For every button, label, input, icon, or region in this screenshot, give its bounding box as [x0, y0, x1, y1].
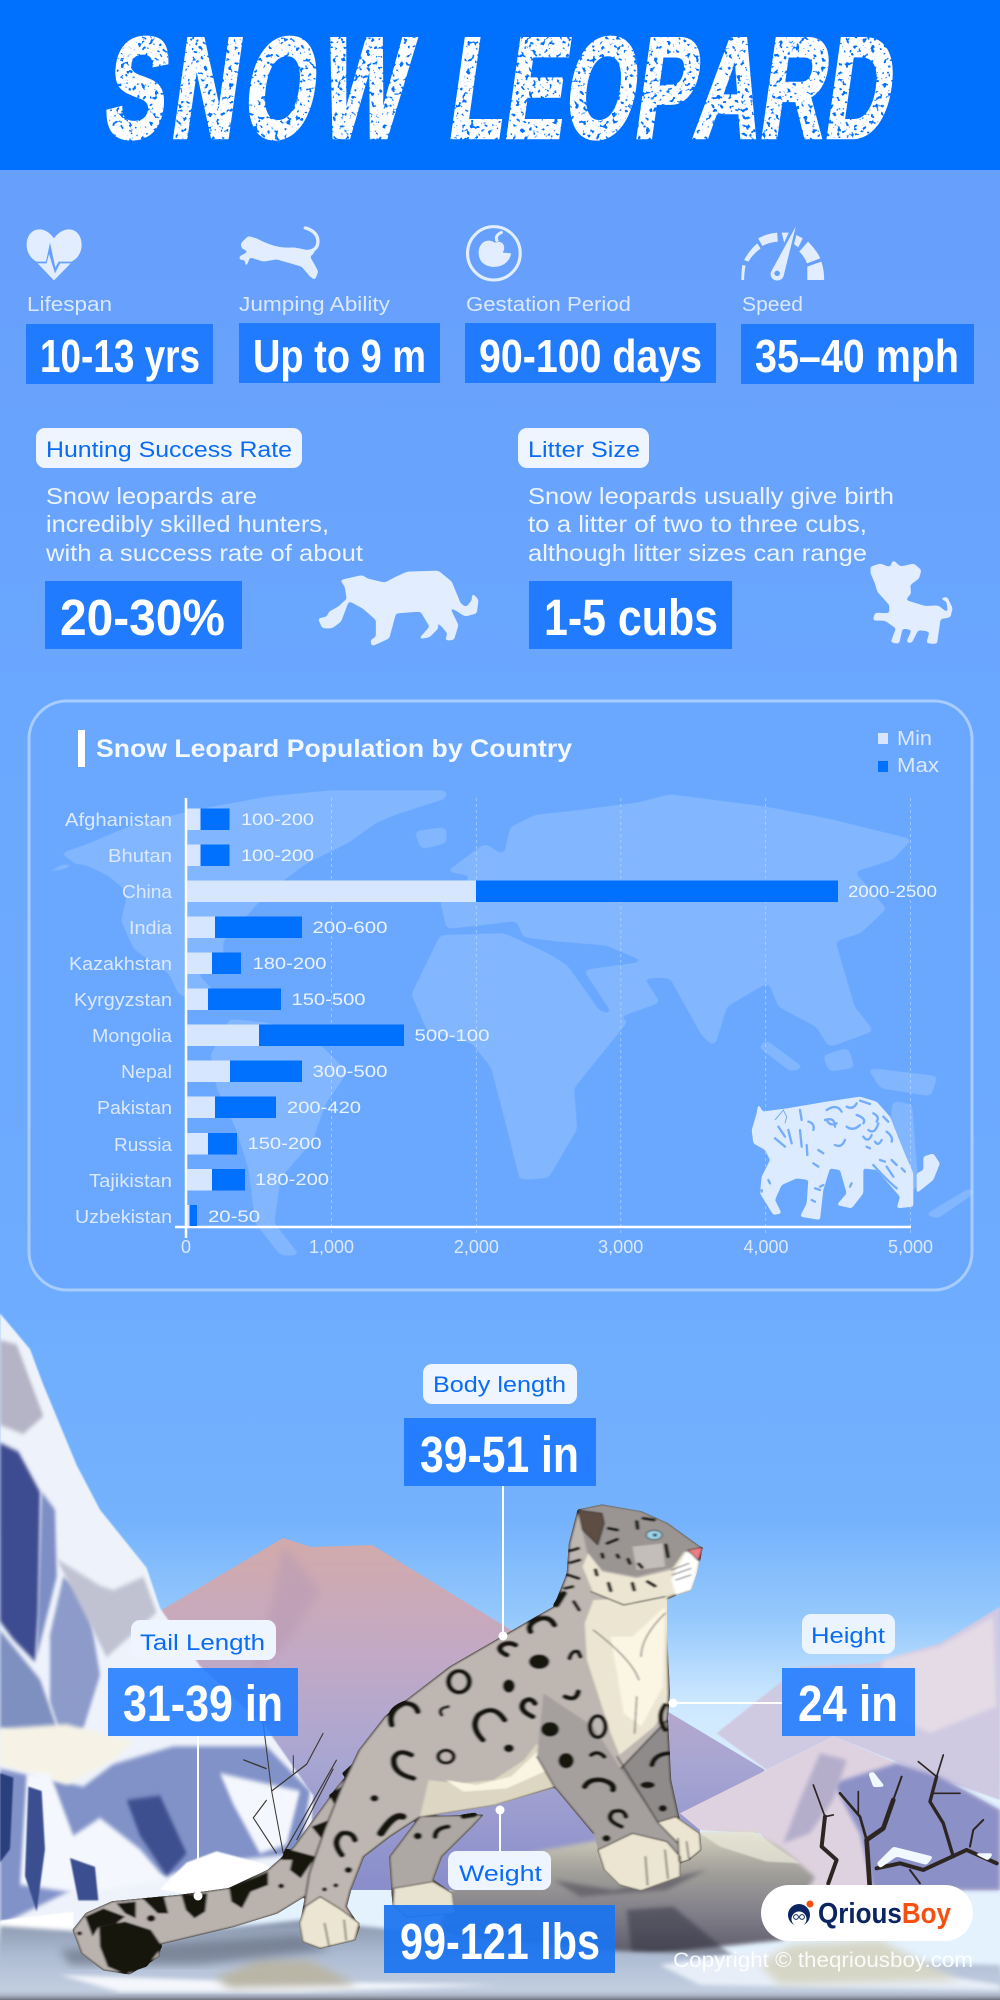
ruff and muzzle — [583, 1552, 700, 1605]
rear paw — [299, 1897, 359, 1948]
rock ledge — [440, 1832, 815, 1970]
text block: hunting description: with a success rate of about — [45, 540, 364, 566]
bar chart — [65, 798, 940, 1257]
text block: litter description — [528, 483, 894, 566]
axis tick labels: 5,000 — [888, 1237, 933, 1257]
panel: litter size: Litter Size — [528, 437, 640, 462]
callout: body length: Body length — [433, 1372, 566, 1397]
row: Pakistan — [97, 1096, 361, 1118]
row: Russia: 150-200 — [248, 1134, 322, 1153]
row: Kazakhstan: Kazakhstan — [69, 954, 172, 974]
icon: heart with pulse — [27, 229, 82, 280]
row: Kazakhstan: 180-200 — [252, 954, 326, 973]
row: Afghanistan: Afghanistan — [65, 810, 172, 830]
row: Kyrgyzstan: Kyrgyzstan — [74, 990, 172, 1010]
row: China: 2000-2500 — [848, 882, 937, 901]
row: Tajikistan — [89, 1169, 329, 1191]
row: Mongolia — [92, 1024, 490, 1046]
row: Afghanistan: 100-200 — [241, 810, 314, 829]
panel: population chart — [29, 701, 973, 1290]
panel: hunting success rate — [36, 428, 479, 649]
right front mountain — [680, 1737, 1000, 1890]
far hind leg — [390, 1815, 483, 1917]
axis tick labels: 4,000 — [743, 1237, 789, 1257]
callout: height: 24 in — [798, 1675, 898, 1732]
row: Kyrgyzstan — [74, 988, 366, 1010]
world map — [32, 790, 973, 1256]
callout: tail length — [108, 1620, 298, 1900]
callout: body length — [404, 1364, 596, 1640]
row: China — [122, 880, 937, 902]
row: Mongolia: Mongolia — [92, 1026, 173, 1046]
panel: litter size: 1-5 cubs — [544, 589, 718, 646]
stat: jumping ability — [239, 227, 440, 383]
stat: lifespan — [26, 229, 213, 384]
stat: jumping ability: Up to 9 m — [253, 330, 426, 382]
row: Uzbekistan: Uzbekistan — [75, 1207, 172, 1227]
text block: litter description: to a litter of two to three cubs, — [528, 511, 867, 537]
row: India: India — [129, 918, 173, 938]
far front leg — [615, 1713, 701, 1867]
panel: hunting success rate: 20-30% — [60, 589, 225, 646]
axis tick labels: 2,000 — [454, 1237, 499, 1257]
near front leg — [537, 1693, 680, 1890]
icon: boy with lightbulb — [788, 1900, 814, 1926]
legend: Max — [897, 755, 939, 777]
icon: embryo in circle — [468, 227, 520, 280]
text block: hunting description — [45, 483, 364, 566]
row: Uzbekistan — [75, 1205, 260, 1227]
spots — [336, 1618, 667, 1855]
logo: QriousBoy — [761, 1885, 973, 1941]
row: India — [129, 916, 388, 938]
scene: mountains and ground — [0, 1313, 1000, 2000]
snow leopard illustration — [73, 1505, 703, 1974]
panel heading: Snow Leopard Population by Country — [96, 735, 572, 763]
icon: leaping cat — [239, 227, 318, 280]
row: Nepal: 300-500 — [312, 1062, 388, 1081]
nose — [688, 1547, 703, 1561]
callout: height: Height — [811, 1623, 885, 1648]
callout: weight: 99-121 lbs — [400, 1913, 600, 1970]
left bare tree — [243, 1724, 337, 1854]
center pink mountain — [160, 1538, 765, 1890]
row: Pakistan: 200-420 — [287, 1098, 361, 1117]
row: Russia — [114, 1133, 322, 1155]
stat: gestation period — [465, 227, 716, 383]
tail tip and markings — [85, 1763, 364, 1974]
icon: cub — [870, 559, 953, 644]
stat: speed: Speed — [742, 294, 803, 316]
header band — [0, 0, 1000, 170]
row: Kazakhstan — [69, 952, 326, 974]
body — [301, 1505, 702, 1948]
head and neck markings — [557, 1518, 668, 1610]
callout: tail length: Tail Length — [140, 1630, 265, 1655]
eye — [646, 1530, 662, 1540]
row: Russia: Russia — [114, 1135, 173, 1155]
icon: speedometer — [741, 227, 824, 281]
legend — [878, 728, 939, 777]
stat: speed: 35–40 mph — [755, 330, 959, 382]
axis tick labels — [181, 1237, 933, 1257]
text block: litter description: Snow leopards usually give birth — [528, 483, 894, 509]
row: Uzbekistan: 20-50 — [208, 1207, 260, 1226]
row: Bhutan — [108, 844, 314, 866]
row: Tajikistan: 180-200 — [255, 1170, 329, 1189]
ear — [578, 1510, 604, 1545]
icon: cat catching bird — [318, 571, 479, 647]
callout: body length: 39-51 in — [420, 1426, 579, 1483]
callout: weight: Weight — [459, 1861, 542, 1886]
title: SNOW LEOPARD — [97, 10, 905, 168]
left snowy cliff — [0, 1313, 313, 1943]
tree snow — [868, 1772, 993, 1868]
axis tick labels: 0 — [181, 1237, 191, 1257]
near paw — [598, 1833, 680, 1891]
whiskers — [593, 1563, 691, 1733]
belly — [420, 1743, 554, 1817]
tail — [73, 1767, 372, 1974]
right back mountain — [717, 1607, 1000, 1800]
panel: litter size — [518, 428, 953, 649]
text block: litter description: although litter sizes can range — [528, 540, 867, 566]
callout: tail length: 31-39 in — [123, 1675, 283, 1732]
row: Bhutan: Bhutan — [108, 846, 172, 866]
row: China: China — [122, 882, 173, 902]
axis tick labels: 3,000 — [598, 1237, 643, 1257]
stat: gestation period: 90-100 days — [479, 330, 702, 382]
axes — [175, 798, 911, 1238]
stat: gestation period: Gestation Period — [466, 294, 631, 316]
mountain ridge shading — [250, 1545, 320, 1680]
text block: hunting description: Snow leopards are — [46, 483, 257, 509]
row: Pakistan: Pakistan — [97, 1098, 172, 1118]
callout: weight — [384, 1806, 615, 1973]
chest fur — [585, 1597, 667, 1755]
row: Nepal — [121, 1060, 388, 1082]
stat: lifespan: 10-13 yrs — [40, 330, 200, 382]
row: Kyrgyzstan: 150-500 — [292, 990, 366, 1009]
logo: QriousBoy: QriousBoy — [818, 1898, 951, 1930]
stat: jumping ability: Jumping Ability — [239, 294, 390, 316]
row: Mongolia: 500-100 — [414, 1026, 490, 1045]
panel heading — [78, 730, 572, 767]
text block: hunting description: incredibly skilled hunters, — [46, 511, 329, 537]
axis tick labels: 1,000 — [309, 1237, 354, 1257]
toe lines — [325, 1838, 689, 1945]
row: Nepal: Nepal — [121, 1062, 172, 1082]
ground — [0, 1920, 1000, 2000]
head — [578, 1505, 702, 1577]
row: Afghanistan — [65, 808, 314, 830]
row: Bhutan: 100-200 — [241, 846, 314, 865]
panel leopard silhouette — [752, 1097, 940, 1220]
stat: lifespan: Lifespan — [27, 294, 112, 316]
right bare trees — [813, 1755, 997, 1890]
callout: height — [668, 1614, 915, 1736]
legend: Min — [897, 728, 932, 750]
row: Tajikistan: Tajikistan — [89, 1171, 172, 1191]
stat: speed — [741, 227, 974, 384]
panel: hunting success rate: Hunting Success Rate — [46, 437, 292, 462]
copyright: Copyright © theqriousboy.com — [673, 1949, 973, 1972]
row: India: 200-600 — [312, 918, 388, 937]
